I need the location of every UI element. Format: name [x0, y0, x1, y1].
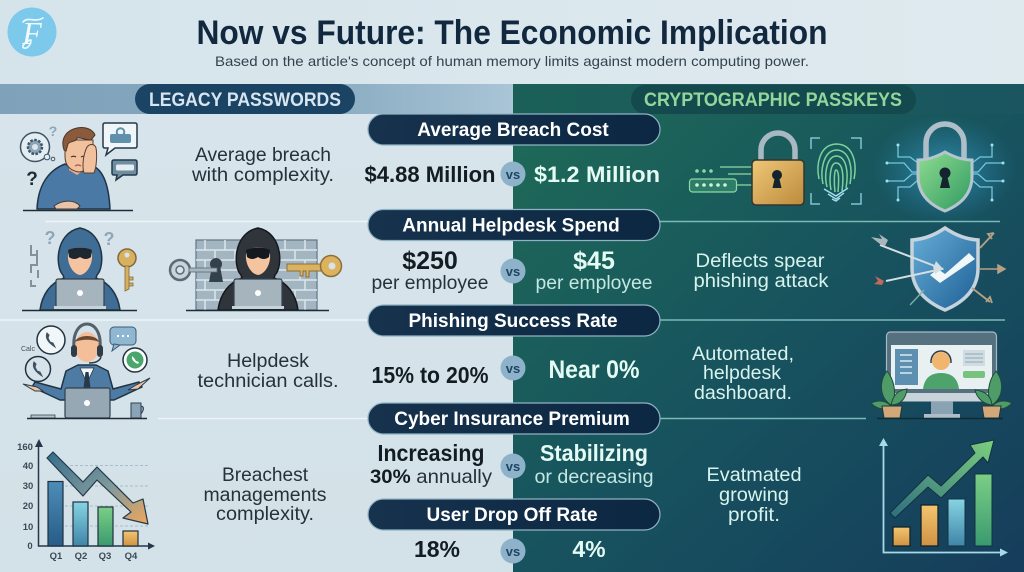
metric pill: user drop off rate: User Drop Off Rate — [426, 505, 598, 526]
metric pill: cyber insurance premium — [368, 403, 660, 434]
vs badge — [500, 258, 526, 284]
icon: automated helpdesk dashboard monitor — [871, 332, 1012, 418]
passkey value: per employee — [536, 272, 652, 294]
chart: declining bars with arrow: 40 — [23, 461, 33, 472]
vs badge — [500, 454, 526, 478]
icon: stressed helpdesk technician — [21, 324, 150, 418]
passkey description: Evatmated — [706, 465, 802, 486]
icon: gold padlock with password and fingerprint — [690, 133, 861, 205]
vs badge: vs — [506, 264, 520, 279]
panel: row 2 annual helpdesk spend — [368, 210, 829, 294]
title: Now vs Future: The Economic Implication — [196, 14, 828, 52]
legacy description: complexity. — [216, 504, 314, 525]
legacy value: per employee — [372, 272, 488, 294]
legacy value: $4.88 Million — [364, 162, 496, 187]
legacy value: 15% to 20% — [372, 362, 488, 388]
panel: row 3 phishing success rate — [198, 305, 794, 404]
panel: row 5 user drop off rate — [368, 499, 660, 564]
legacy value — [372, 247, 488, 294]
vs badge — [500, 356, 526, 380]
legacy description: Breachest — [222, 465, 309, 486]
icon: hooded hacker with key: ? — [44, 228, 56, 248]
legacy description: Average breach — [195, 145, 331, 166]
passkey description: Automated, — [692, 344, 794, 365]
passkey value: Stabilizing — [540, 440, 648, 466]
chart: declining bars with arrow: 160 — [17, 442, 33, 453]
chart: declining bars with arrow: Q4 — [125, 551, 138, 562]
passkey value — [534, 440, 654, 488]
passkey value: $1.2 Million — [534, 162, 660, 187]
legacy description: technician calls. — [198, 371, 338, 392]
icon: brand logo: F — [21, 15, 42, 51]
legacy value: 30% annually — [370, 466, 492, 488]
icon: brand logo — [8, 8, 56, 56]
passkey value: Near 0% — [548, 356, 640, 384]
vs badge: vs — [506, 167, 520, 182]
subtitle: Based on the article's concept of human memory limits against modern computing power. — [215, 53, 809, 69]
passkey value: 4% — [572, 536, 606, 562]
chart: declining bars with arrow: Q1 — [50, 551, 63, 562]
legacy description: with complexity. — [191, 165, 334, 186]
vs badge: vs — [506, 544, 520, 559]
legacy value: $250 — [402, 247, 458, 275]
vs badge: vs — [506, 361, 520, 376]
chart: declining bars with arrow: Q3 — [99, 551, 111, 562]
chart: declining bars with arrow: 0 — [27, 541, 33, 552]
legacy value — [370, 440, 492, 488]
icon: shield deflecting arrows — [871, 228, 1005, 310]
icon: circuit shield padlock — [886, 124, 1004, 211]
passkey description: Deflects spear — [696, 251, 825, 272]
metric pill: user drop off rate — [368, 499, 660, 530]
passkey description: profit. — [728, 505, 780, 526]
icon: stressed user: ? — [26, 169, 38, 190]
vs badge — [500, 538, 526, 564]
icon: hooded hacker with key: ? — [104, 229, 114, 249]
legacy value: 18% — [414, 536, 460, 562]
metric pill: phishing success rate: Phishing Success Rate — [408, 311, 618, 332]
passkey value: $45 — [573, 247, 615, 275]
chart: declining bars with arrow: Q2 — [75, 551, 87, 562]
chart: declining bars with arrow — [17, 439, 155, 562]
icon: stressed user — [20, 123, 137, 210]
metric pill: cyber insurance premium: Cyber Insurance Premium — [394, 409, 630, 430]
legacy value: Increasing — [378, 440, 484, 466]
metric pill: average breach cost: Average Breach Cost — [417, 120, 609, 141]
column header band: legacy passwords — [0, 84, 513, 114]
column header band: legacy passwords: LEGACY PASSWORDS — [149, 90, 341, 111]
icon: hacker behind brick wall with keys — [170, 228, 342, 310]
passkey description: phishing attack — [694, 271, 829, 292]
panel: row 4 cyber insurance premium — [204, 403, 802, 526]
vs badge — [500, 162, 526, 186]
metric pill: annual helpdesk spend: Annual Helpdesk Spend — [402, 216, 620, 236]
passkey description: growing — [719, 485, 789, 506]
column header band: cryptographic passkeys — [513, 84, 1024, 114]
chart: declining bars with arrow: 30 — [23, 481, 33, 492]
passkey value — [536, 247, 652, 294]
passkey description: dashboard. — [694, 383, 792, 404]
column header band: cryptographic passkeys: CRYPTOGRAPHIC PASSKEYS — [644, 90, 902, 111]
legacy description: Helpdesk — [227, 351, 310, 372]
passkey value: or decreasing — [534, 466, 654, 488]
metric pill: annual helpdesk spend — [368, 210, 660, 240]
passkey description: helpdesk — [703, 363, 782, 384]
panel: row 1 average breach cost — [191, 114, 660, 187]
icon: stressed user: ? — [49, 123, 57, 139]
icon: stressed helpdesk technician: Calc — [21, 346, 35, 353]
chart: declining bars with arrow: 20 — [23, 501, 33, 512]
chart: declining bars with arrow: 10 — [23, 522, 33, 533]
legacy description: managements — [204, 485, 326, 506]
vs badge: vs — [506, 459, 520, 474]
metric pill: phishing success rate — [368, 305, 660, 336]
icon: hooded hacker with key — [22, 228, 137, 310]
chart: rising bars with arrow — [879, 438, 1008, 556]
metric pill: average breach cost — [368, 114, 660, 145]
